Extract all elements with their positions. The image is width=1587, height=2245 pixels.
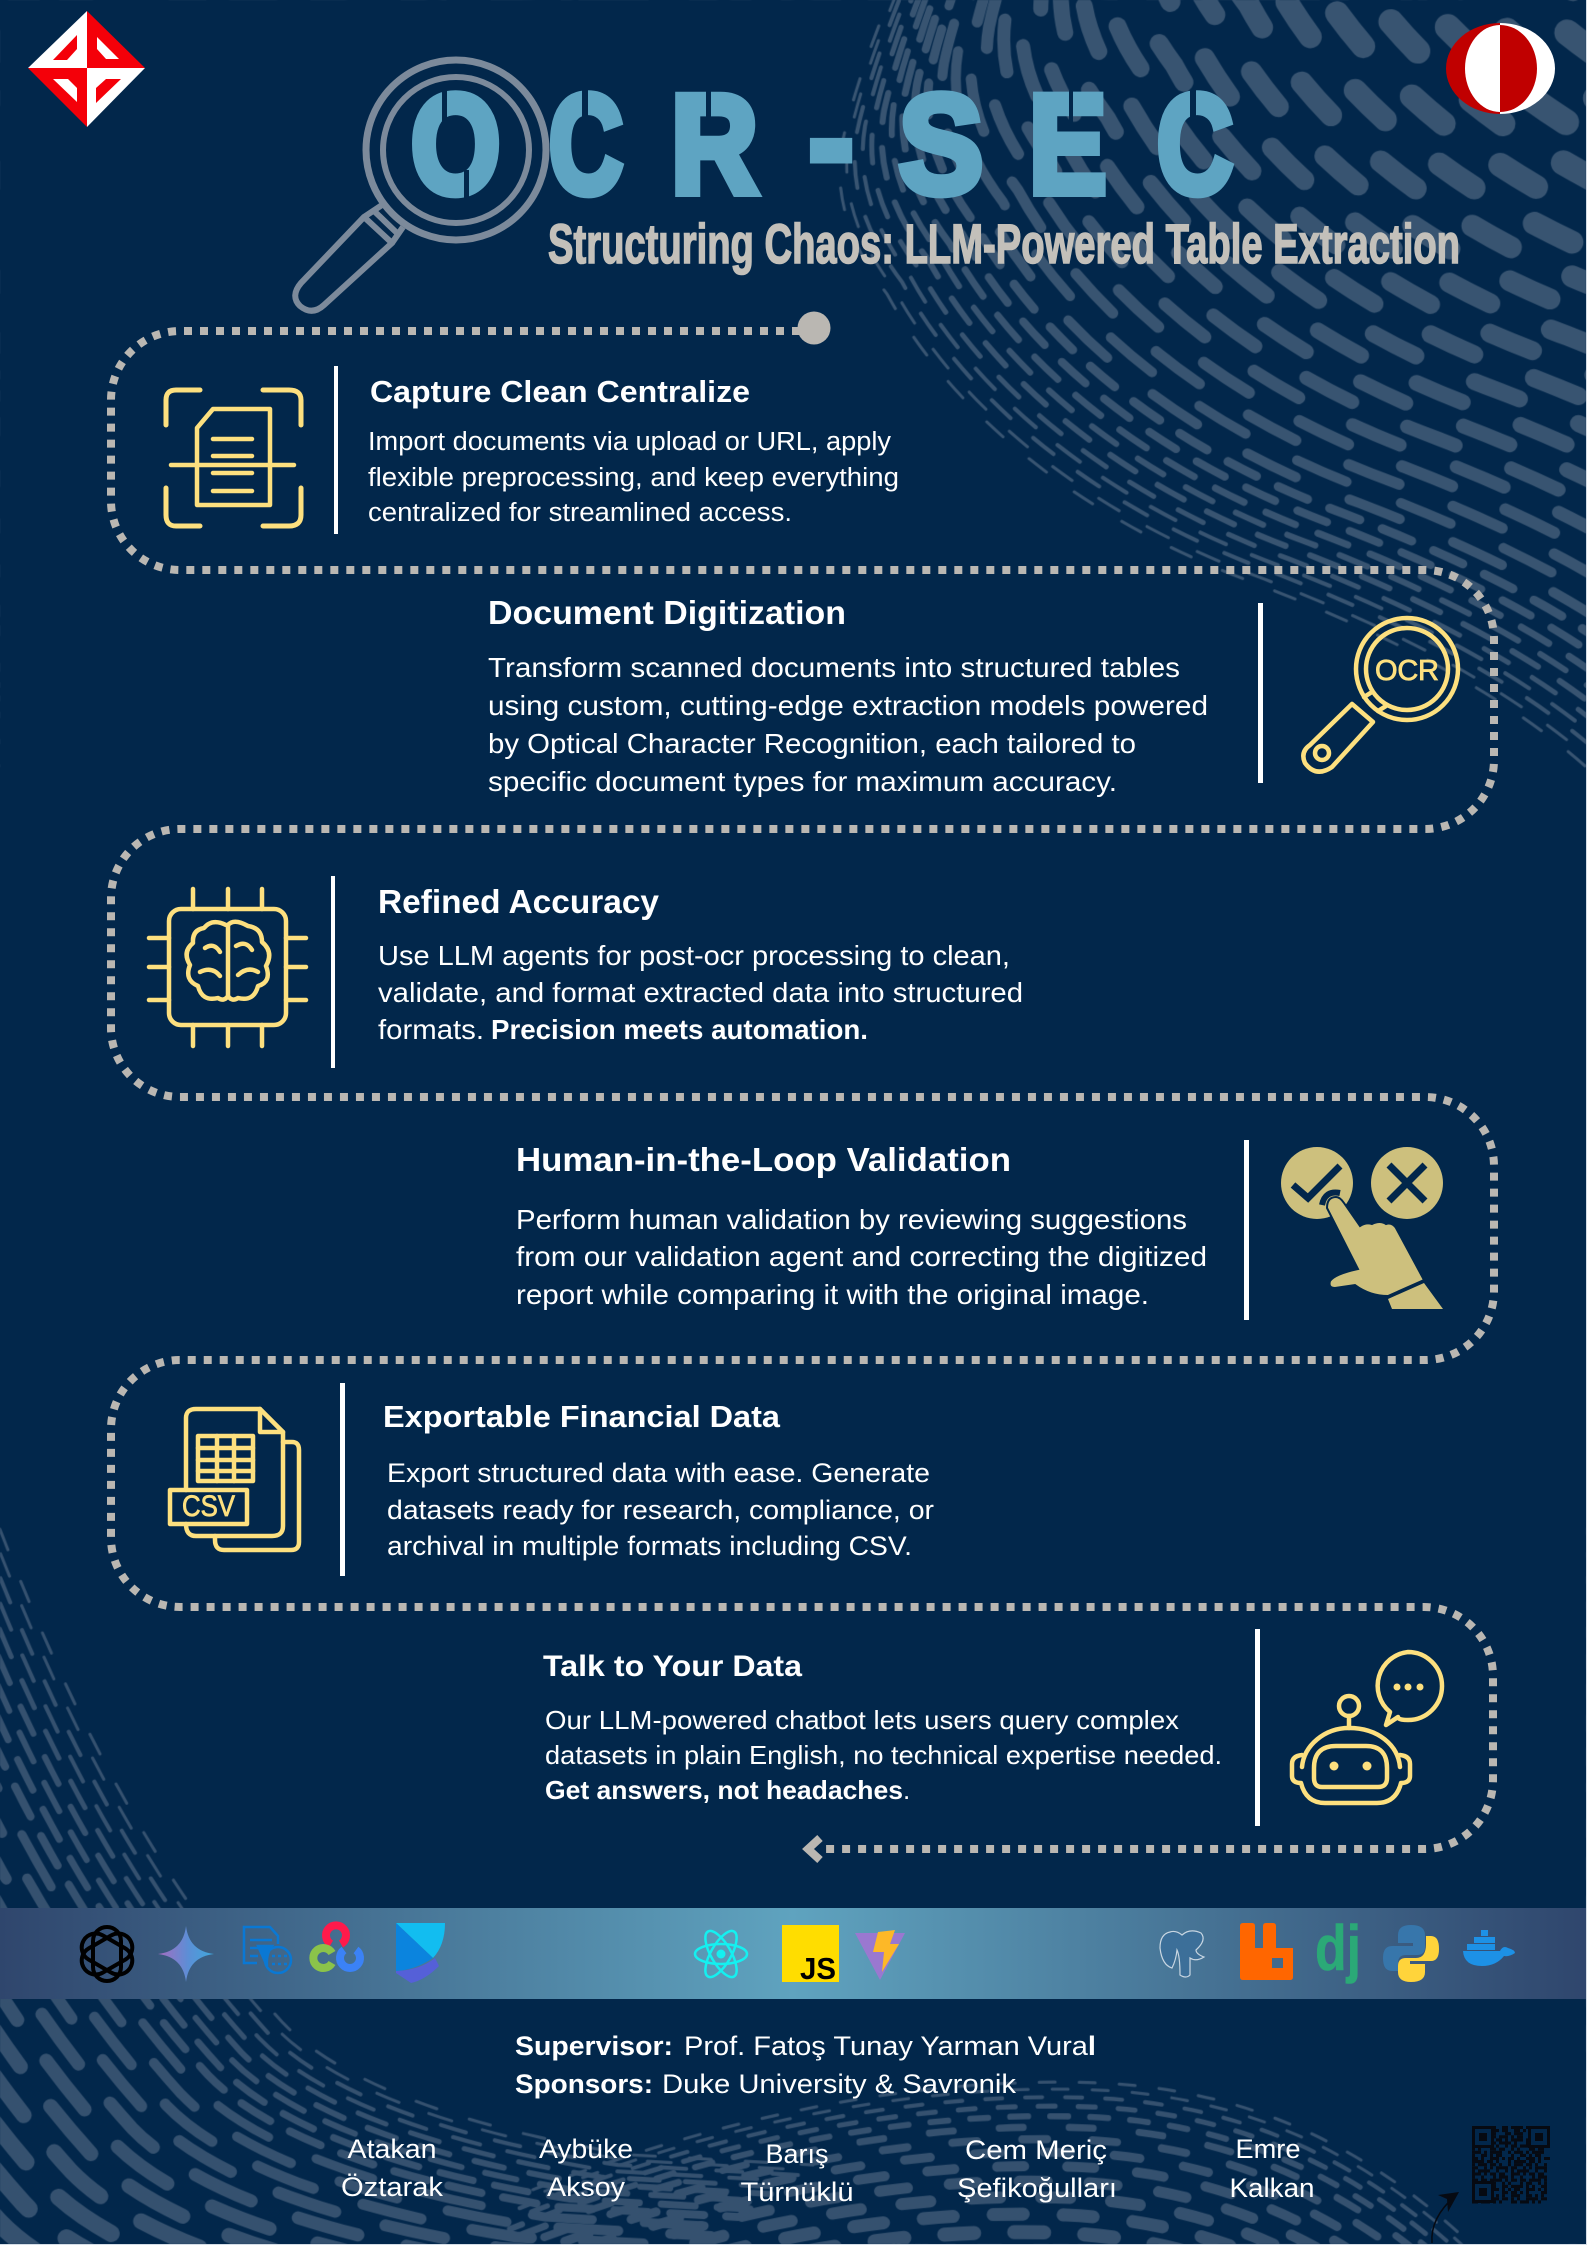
team names: Şefikoğulları xyxy=(957,2173,1117,2203)
panel: talk to your data: Talk to Your Data xyxy=(543,1650,802,1683)
icon: brain chip xyxy=(149,889,306,1046)
team names: Aybüke xyxy=(539,2134,633,2164)
panel: capture clean centralize: Import documents via upload or URL, apply xyxy=(368,428,891,456)
panel: refined accuracy: formats. xyxy=(378,1014,484,1045)
team names: Atakan xyxy=(348,2134,436,2164)
icon: CSV file xyxy=(170,1409,299,1550)
icon: Django: dj xyxy=(1315,1912,1361,1984)
flow end arrow xyxy=(808,1838,820,1860)
panel: talk to your data xyxy=(543,1629,1442,1826)
panel: document digitization: using custom, cutting-edge extraction models powered xyxy=(488,690,1208,721)
credits: supervisor and sponsors: Supervisor: xyxy=(515,2031,673,2061)
panel: human in the loop validation: from our validation agent and correcting the digitized xyxy=(516,1241,1207,1272)
panel: human in the loop validation: Human-in-the-Loop Validation xyxy=(516,1141,1011,1178)
title: O xyxy=(411,67,500,223)
panel: document digitization: by Optical Character Recognition, each tailored to xyxy=(488,728,1136,759)
team names: Barış xyxy=(766,2139,828,2169)
icon: OCR magnifier xyxy=(1303,618,1458,772)
panel: document digitization: Document Digitization xyxy=(488,594,846,631)
icon: JavaScript xyxy=(782,1925,839,1986)
panel: refined accuracy xyxy=(149,876,1023,1068)
icon: JavaScript: JS xyxy=(800,1951,836,1986)
panel: exportable financial data: datasets ready for research, compliance, or xyxy=(387,1495,934,1525)
title: S xyxy=(899,66,983,223)
icon: Python xyxy=(1383,1925,1439,1982)
credits: supervisor and sponsors: Duke University & Savronik xyxy=(662,2069,1017,2099)
panel: talk to your data: Get answers, not headaches xyxy=(545,1775,903,1805)
team names: Öztarak xyxy=(341,2172,444,2202)
panel: human in the loop validation: Perform human validation by reviewing suggestions xyxy=(516,1204,1187,1235)
team names: Emre xyxy=(1236,2134,1300,2164)
icon: RabbitMQ xyxy=(1240,1923,1293,1980)
panel: refined accuracy: validate, and format extracted data into structured xyxy=(378,977,1023,1008)
icon: document scan xyxy=(166,390,301,526)
panel: exportable financial data: Exportable Financial Data xyxy=(383,1399,781,1434)
panel: capture clean centralize: Capture Clean Centralize xyxy=(370,374,750,409)
icon: Vite xyxy=(855,1930,905,1980)
icon: Gemini star xyxy=(158,1926,214,1982)
panel: document digitization xyxy=(488,594,1458,797)
title: C xyxy=(1157,67,1233,223)
title: - xyxy=(809,60,853,217)
panel: exportable financial data xyxy=(170,1383,934,1576)
panel: talk to your data: datasets in plain English, no technical expertise needed. xyxy=(545,1740,1222,1770)
panel: document digitization: Transform scanned documents into structured tables xyxy=(488,652,1180,683)
team names: Cem Meriç xyxy=(965,2135,1107,2165)
icon: Docker whale xyxy=(1463,1930,1515,1966)
panel: document digitization: specific document types for maximum accuracy. xyxy=(488,766,1117,797)
team names: Türnüklü xyxy=(740,2177,854,2207)
panel: refined accuracy: Precision meets automation. xyxy=(491,1014,868,1045)
panel: refined accuracy: Refined Accuracy xyxy=(378,883,660,920)
icon: blue folded logo xyxy=(396,1923,445,1983)
title: R xyxy=(671,66,758,223)
credits: supervisor and sponsors: Sponsors: xyxy=(515,2069,653,2099)
title: E xyxy=(1029,67,1107,223)
icon: CSV file: CSV xyxy=(182,1490,235,1523)
icon: check and cross with pointing hand xyxy=(1281,1147,1443,1309)
title: C xyxy=(549,66,623,222)
panel: talk to your data: Our LLM-powered chatbot lets users query complex xyxy=(545,1705,1179,1735)
panel: capture clean centralize: centralized for streamlined access. xyxy=(368,499,792,527)
panel: refined accuracy: Use LLM agents for post-ocr processing to clean, xyxy=(378,940,1010,971)
arrow pointing to QR code xyxy=(1432,2192,1459,2243)
panel: capture clean centralize xyxy=(166,366,899,534)
panel: exportable financial data: archival in multiple formats including CSV. xyxy=(387,1531,912,1561)
panel: human in the loop validation xyxy=(516,1140,1443,1320)
credits: supervisor and sponsors xyxy=(515,2031,1096,2099)
flow start dot xyxy=(798,312,830,344)
icon: OpenAI knot xyxy=(77,1927,137,1981)
icon: OCR magnifier: OCR xyxy=(1375,655,1439,687)
panel: capture clean centralize: flexible preprocessing, and keep everything xyxy=(368,464,899,492)
QR code xyxy=(1472,2128,1550,2202)
icon: OpenCV rings xyxy=(313,1925,360,1968)
panel: human in the loop validation: report while comparing it with the original image. xyxy=(516,1279,1149,1310)
team names: Aksoy xyxy=(547,2172,626,2202)
icon: PostgreSQL elephant xyxy=(1160,1931,1204,1977)
title xyxy=(411,60,1233,223)
logo: round red and white emblem xyxy=(1446,23,1555,114)
tech stack band xyxy=(0,1908,1586,1999)
icon: chatbot robot xyxy=(1292,1652,1442,1803)
team names: Kalkan xyxy=(1230,2173,1314,2203)
team names xyxy=(341,2134,1314,2207)
icon: React atom xyxy=(695,1926,747,1982)
icon: document intelligence xyxy=(244,1927,291,1973)
logo: university emblem diamond xyxy=(28,11,145,127)
credits: supervisor and sponsors: Prof. Fatoş Tunay Yarman Vura l xyxy=(684,2031,1096,2061)
panel: talk to your data: . xyxy=(903,1775,910,1805)
panel: exportable financial data: Export structured data with ease. Generate xyxy=(387,1458,930,1488)
dotted flow path xyxy=(111,331,1494,1849)
icon: large magnifying glass xyxy=(295,60,546,311)
